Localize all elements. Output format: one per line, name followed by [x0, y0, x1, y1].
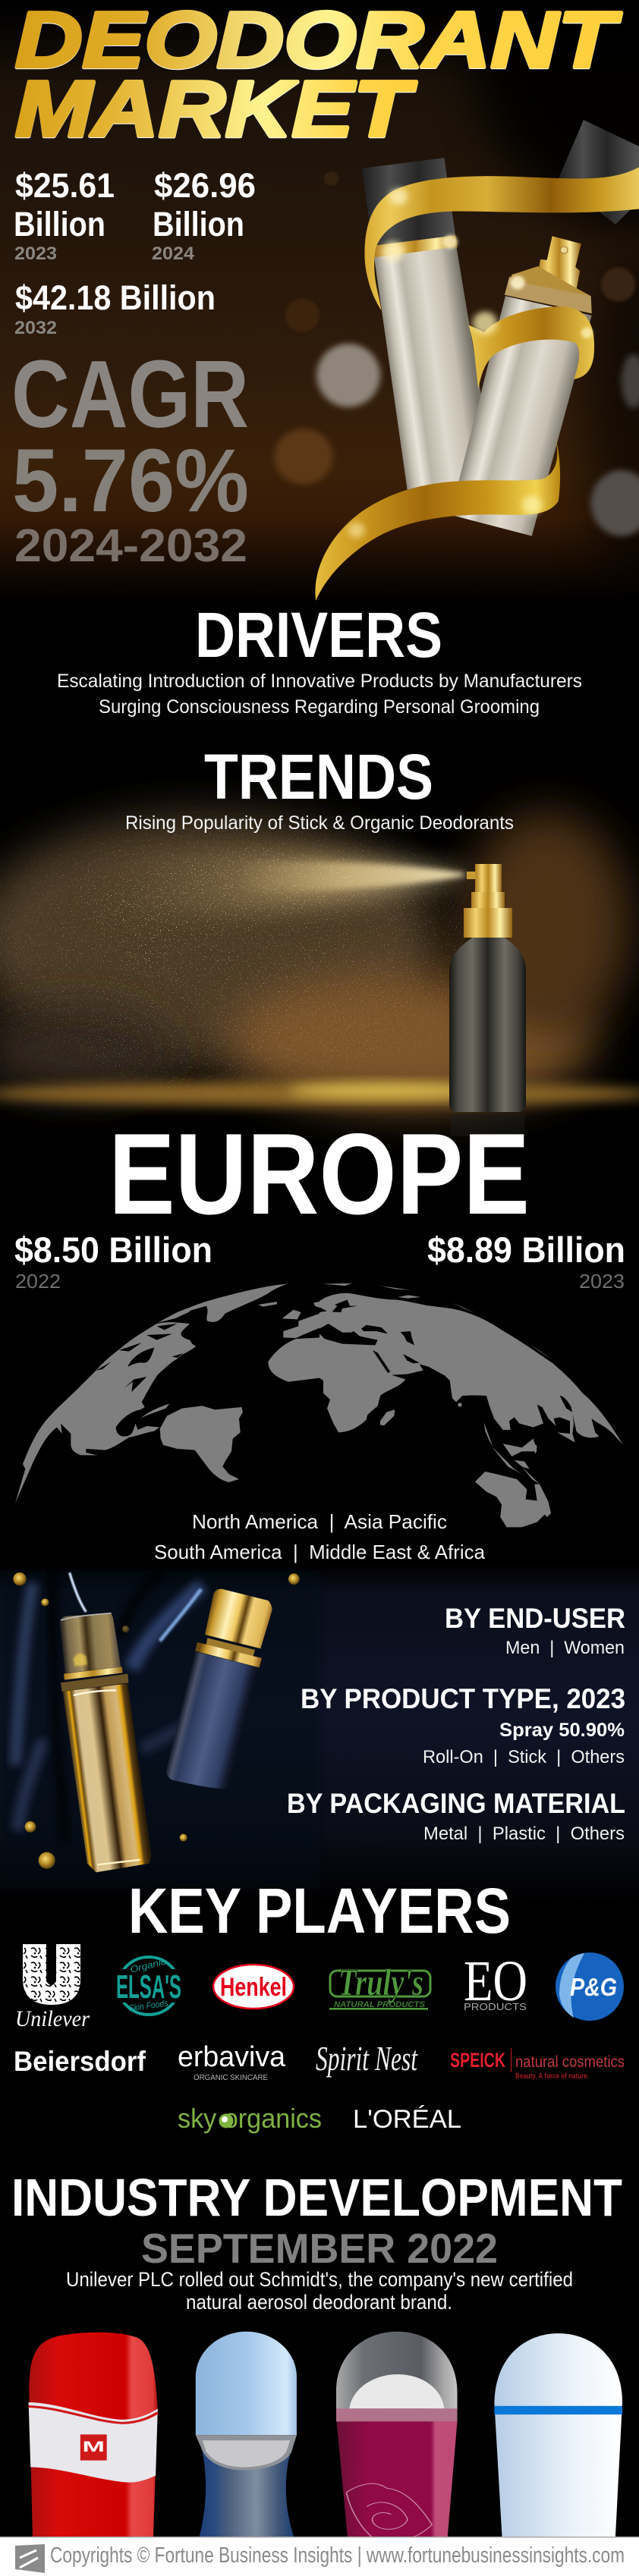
segment: by end-user: BY END-USER	[445, 1603, 625, 1634]
stat: Europe 2022: $8.50 Billion	[14, 1230, 212, 1270]
segment: by product type	[301, 1683, 625, 1767]
white deodorant	[494, 2333, 622, 2537]
fabric folds	[0, 1563, 320, 1889]
stat: Europe 2023	[427, 1230, 625, 1293]
stat: 2023 market size: 2023	[14, 243, 57, 264]
maroon deodorant	[336, 2332, 458, 2537]
heading: trends: TRENDS	[204, 741, 433, 812]
illustration: roll-on deodorants	[29, 2332, 622, 2537]
stat: 2023 market size: $25.61	[15, 166, 115, 205]
logo: Truly's Natural Products: Truly's	[338, 1961, 423, 2003]
bokeh lights	[274, 172, 639, 536]
logo: Elsa's Organic Skin Foods: Organic	[129, 1956, 167, 1975]
left bottle body	[374, 247, 495, 492]
text: development description: Unilever PLC rolled out Schmidt's, the company's new certified	[66, 2268, 573, 2291]
stat: Europe 2022: 2022	[15, 1270, 61, 1293]
logo: Speick natural cosmetics	[450, 2048, 625, 2081]
subheading: date: SEPTEMBER 2022	[141, 2225, 498, 2272]
stat: 2024 market size	[152, 166, 256, 264]
text: drivers list: Surging Consciousness Regarding Personal Grooming	[99, 696, 540, 718]
segment: by packaging material: Metal | Plastic | Others	[423, 1824, 625, 1844]
spray nozzle	[537, 236, 581, 288]
left bottle gold ring	[373, 235, 458, 259]
illustration: navy cosmetic bottle	[166, 1589, 272, 1789]
right bottle shoulder	[505, 277, 592, 313]
stat: 2032 market size: 2032	[14, 318, 57, 338]
logo: Elsa's Organic Skin Foods: Skin Foods	[128, 1997, 168, 2014]
panel: industry development	[11, 2168, 622, 2537]
logo: Sky Organics: sky organics	[178, 2103, 322, 2134]
panel: trends with spray bottle	[0, 741, 639, 1136]
logo: Beiersdorf: Beiersdorf	[14, 2046, 146, 2077]
segment: by end-user	[445, 1603, 625, 1658]
stat: CAGR: CAGR	[11, 341, 249, 448]
logo: P&G	[556, 1952, 624, 2021]
title	[15, 0, 622, 153]
heading: Europe: EUROPE	[109, 1110, 530, 1239]
logo: Speick natural cosmetics: Beauty. A force of nature.	[515, 2072, 589, 2081]
heading: drivers: DRIVERS	[195, 599, 442, 671]
panel: drivers	[57, 599, 582, 718]
title: MARKET	[15, 65, 417, 153]
stat: 2032 market size	[14, 278, 216, 338]
stat: 2023 market size: Billion	[14, 205, 105, 243]
segment: by end-user: Men | Women	[505, 1638, 625, 1658]
text: drivers list: Escalating Introduction of Innovative Products by Manufacturers	[57, 671, 582, 692]
text: other regions: South America | Middle East & Africa	[154, 1541, 486, 1563]
stat: 2024 market size: 2024	[152, 243, 195, 264]
logo: Henkel	[213, 1965, 294, 2009]
logo: Unilever: Unilever	[15, 2006, 90, 2031]
segment: by product type: BY PRODUCT TYPE, 2023	[301, 1683, 625, 1714]
stat: Europe 2023: 2023	[579, 1270, 625, 1293]
right cap	[559, 120, 639, 225]
logo: Speick natural cosmetics: natural cosmetics	[515, 2053, 625, 2071]
logo: Speick natural cosmetics: SPEICK	[450, 2049, 505, 2072]
gold beads	[13, 1572, 300, 1869]
illustration: black spray bottle	[449, 864, 526, 1136]
logo: erbaviva: ORGANIC SKINCARE	[194, 2073, 268, 2082]
segment: by product type: Spray 50.90%	[499, 1720, 625, 1741]
world map globe	[15, 1283, 623, 1527]
stat: 2024 market size: Billion	[153, 205, 244, 243]
text: drivers list	[57, 671, 582, 718]
heading: key players: KEY PLAYERS	[128, 1875, 511, 1946]
logo: Unilever	[15, 1944, 90, 2031]
text: trend item: Rising Popularity of Stick & Organic Deodorants	[125, 812, 514, 834]
right bottle body	[450, 296, 592, 536]
logo: EO Products: PRODUCTS	[464, 2002, 527, 2012]
stat: CAGR	[11, 341, 249, 571]
map: Eurasia, Africa and Australia	[320, 1283, 623, 1527]
map: Americas and western edge	[15, 1284, 320, 1503]
panel: market overview hero	[0, 0, 639, 603]
logo: Truly's Natural Products: NATURAL PRODUCTS	[334, 2000, 426, 2009]
text: other regions: North America | Asia Pacific	[192, 1510, 447, 1533]
spray background glow	[0, 796, 639, 1115]
red deodorant: M	[82, 2438, 105, 2455]
logo: Henkel: Henkel	[220, 1973, 287, 2002]
logo: Truly's Natural Products	[329, 1961, 430, 2010]
logo: P&G: P&G	[570, 1973, 617, 2001]
stat: CAGR: 2024-2032	[14, 520, 247, 571]
stat: Europe 2022	[14, 1230, 212, 1293]
stat: Europe 2023: $8.89 Billion	[427, 1230, 625, 1270]
logo: Fortune Business Insights	[15, 2544, 45, 2573]
text: development description	[66, 2268, 573, 2314]
segment: by product type: Roll-On | Stick | Others	[423, 1747, 625, 1767]
segment: by packaging material	[287, 1788, 625, 1844]
text: development description: natural aerosol deodorant brand.	[186, 2291, 452, 2314]
logo: Spirit Nest: Spirit Nest	[316, 2039, 418, 2078]
stat: 2023 market size	[14, 166, 115, 264]
stat: 2024 market size: $26.96	[154, 166, 256, 205]
logo: EO Products: EO	[464, 1949, 527, 2013]
left bottle cap	[362, 158, 455, 248]
text: other regions	[154, 1510, 486, 1563]
stat: CAGR: 5.76%	[12, 431, 249, 531]
middle ribbon	[469, 306, 594, 389]
panel: Europe region	[14, 1110, 625, 1563]
panel: segmentation	[0, 1563, 639, 1905]
logo: Elsa's Organic Skin Foods	[114, 1956, 184, 2015]
top ribbon	[364, 167, 639, 310]
logo: erbaviva: erbaviva	[178, 2041, 286, 2073]
logo: L'Oreal: L'ORÉAL	[353, 2105, 461, 2134]
panel: key players	[14, 1875, 625, 2134]
glints	[389, 188, 408, 205]
blue deodorant	[196, 2332, 297, 2537]
illustration: gold cosmetic bottle	[60, 1613, 151, 1872]
red deodorant	[29, 2333, 158, 2537]
footer: copyright bar	[0, 2537, 639, 2576]
stat: 2032 market size: $42.18 Billion	[15, 278, 216, 317]
logo: Elsa's Organic Skin Foods: ELSA'S	[116, 1968, 181, 2006]
bottom ribbon	[315, 438, 560, 601]
illustration: aerosol bottles with gold ribbon	[315, 120, 639, 601]
